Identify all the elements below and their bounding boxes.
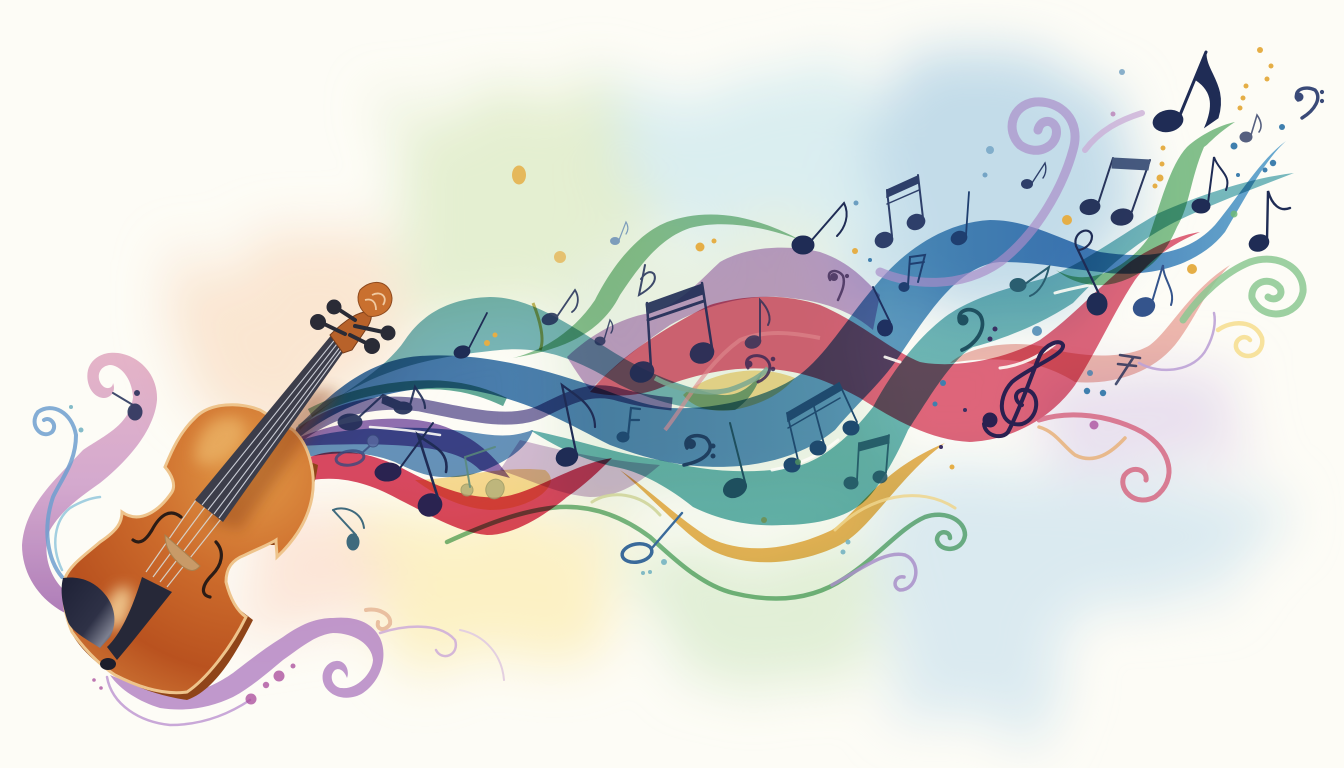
icon: large teal clef curl bbox=[958, 310, 982, 350]
icon: note on pink ribbon bbox=[113, 390, 142, 420]
icon: large double-flag note bbox=[1151, 52, 1221, 134]
ribbon: purple upper band bbox=[567, 248, 880, 390]
violin: light patch bbox=[195, 417, 245, 465]
icon: eighth note on teal bbox=[541, 290, 578, 326]
icon: small note by the top ribbon bbox=[595, 320, 613, 345]
icon: small grey note bbox=[1240, 115, 1261, 142]
icon: stemmed note on dark overlap bbox=[873, 287, 892, 336]
ribbon: green right swoosh bbox=[1056, 122, 1235, 285]
flourish: purple tail bbox=[1085, 113, 1142, 150]
icon: eighth note on red bbox=[743, 300, 770, 350]
ribbon: indigo strand bbox=[298, 392, 672, 436]
ribbon: salmon tail bbox=[950, 265, 1230, 383]
violin bbox=[62, 282, 394, 700]
icon: beamed note on blue bbox=[899, 255, 925, 292]
dots: pink and violet bbox=[92, 112, 1115, 704]
icon: blue eighth note bbox=[1130, 265, 1172, 320]
icon: eighth note at ribbon crest bbox=[792, 203, 847, 254]
ribbon of colour flowing from the violin bbox=[296, 122, 1294, 599]
icon: eighth note on green swoosh bbox=[1192, 157, 1227, 213]
flourish: yellow spiral bbox=[1218, 323, 1262, 356]
flourish: thin green pair near yellow band bbox=[592, 495, 660, 515]
violin: strings to tailpiece bbox=[146, 500, 221, 587]
ribbon: teal upper band bbox=[298, 297, 762, 430]
ribbon: main blue band bbox=[296, 141, 1286, 467]
icon: small note by spiral bbox=[1022, 163, 1046, 188]
flourish: pink spiral bbox=[1039, 415, 1169, 500]
icon: treble clef bbox=[983, 342, 1063, 436]
flourish: purple thin curve bbox=[1139, 313, 1215, 370]
flourish: small purple curl low bbox=[832, 554, 916, 590]
ribbon: pale gap highlights bbox=[370, 285, 1090, 470]
icon: pale olive beamed notes bbox=[461, 447, 507, 502]
icon: open ring note on ribbon bbox=[335, 435, 379, 467]
flourish: light blue thin curve bbox=[55, 497, 100, 570]
ribbon: green strand under blue bbox=[310, 385, 505, 413]
ribbon: teal lower band bbox=[530, 173, 1294, 525]
violin: end button bbox=[100, 658, 116, 670]
violin: tailpiece bbox=[107, 577, 172, 660]
violin: fingerboard bbox=[195, 333, 347, 522]
icon: quarter note on blue crest bbox=[949, 192, 969, 247]
ribbon: purple lower band bbox=[298, 419, 510, 478]
ribbon: olive bridge stroke bbox=[533, 303, 542, 350]
violin: fingerboard cast shadow bbox=[205, 390, 340, 530]
scattered paint dots bbox=[69, 47, 1285, 704]
ribbon: golden lower band bbox=[620, 443, 945, 562]
icon: bass clef top right bbox=[1295, 88, 1324, 118]
violin: chin rest bbox=[62, 578, 114, 648]
violin: bridge bbox=[165, 535, 200, 570]
flourish: lilac curl bbox=[380, 627, 456, 656]
dots: gold bbox=[484, 47, 1274, 470]
icon: teal eighth note beside violin bbox=[333, 508, 364, 550]
violin: scroll bbox=[358, 282, 392, 316]
icon: beamed sixteenth pair bbox=[627, 283, 717, 386]
icon: eighth note far right bbox=[1247, 191, 1290, 254]
violin: f-hole lower bbox=[203, 542, 221, 597]
dots: blue bbox=[854, 69, 1285, 406]
icon: looped note on red tail bbox=[1075, 231, 1107, 315]
ribbon: mauve low band bbox=[500, 440, 660, 497]
dots: dark bbox=[939, 326, 998, 449]
watercolor background washes bbox=[170, 45, 1280, 730]
icon: double beamed note top bbox=[873, 175, 927, 250]
flourish: thin lilac underline bbox=[107, 677, 250, 725]
icon: quarter note on teal band bbox=[720, 423, 750, 501]
icon: notes beamed on dark ribbon bbox=[338, 387, 425, 430]
violin: side shadow bbox=[70, 460, 318, 700]
violin: lower light patch bbox=[104, 586, 132, 629]
icon: blue ring note low bbox=[621, 513, 682, 564]
flourish: lilac thin tail bbox=[460, 630, 504, 680]
flourish: purple spiral top bbox=[880, 102, 1075, 282]
icon: bass clef over teal strand bbox=[746, 356, 775, 382]
music notes bbox=[113, 52, 1324, 564]
violin: pegs bbox=[312, 302, 394, 352]
icon: dark note left of pair bbox=[374, 423, 433, 482]
icon: small pale note bbox=[610, 222, 628, 244]
dots: teal and green bbox=[69, 210, 1238, 575]
flourish: left ribbon fill bbox=[22, 353, 157, 613]
ribbon: bass-clef sage strand bbox=[655, 368, 768, 392]
flourish: peach curl bbox=[366, 610, 390, 629]
ribbon: pale yellow fills bbox=[415, 371, 795, 510]
flourish: blue swirl left bbox=[35, 408, 76, 577]
icon: beamed pair top right bbox=[1079, 158, 1150, 227]
icon: small beam note on blue bbox=[617, 408, 640, 442]
icon: quarter note on teal bbox=[453, 313, 487, 360]
flourish: orange swirl bbox=[1039, 427, 1125, 459]
ribbon: red upper band bbox=[590, 232, 1200, 442]
violin: body bbox=[64, 405, 313, 693]
flourish: yellow arc low bbox=[835, 496, 955, 530]
icon: dark flagged note bbox=[414, 435, 447, 520]
spiral flourishes bbox=[22, 102, 1303, 725]
violin: pegbox bbox=[330, 312, 371, 353]
flourish: green spiral right bbox=[1183, 259, 1303, 320]
ribbon: salmon arc strand bbox=[665, 333, 820, 430]
icon: rest-like beam note on red bbox=[1116, 355, 1140, 384]
ribbon: green lower strand bbox=[447, 507, 965, 599]
ribbon: lower blue band bbox=[296, 428, 533, 477]
icon: bass clef on blue bbox=[684, 436, 715, 465]
violin: scroll curl bbox=[365, 293, 385, 310]
ribbon: green top strand bbox=[513, 215, 800, 358]
ribbon: red lower band bbox=[310, 452, 612, 535]
violin: fingerboard strings bbox=[202, 337, 345, 518]
icon: teal flag note bbox=[1010, 267, 1049, 296]
icon: triple beamed notes bbox=[784, 383, 859, 472]
icon: flat sign bbox=[639, 265, 655, 295]
icon: quarter note flag at centre bbox=[554, 385, 595, 469]
flourish: purple bottom ribbon bbox=[110, 618, 383, 710]
violin: f-hole upper bbox=[133, 513, 181, 542]
icon: beamed pair low bbox=[844, 435, 889, 489]
icon: bass clef on purple bbox=[829, 271, 849, 300]
